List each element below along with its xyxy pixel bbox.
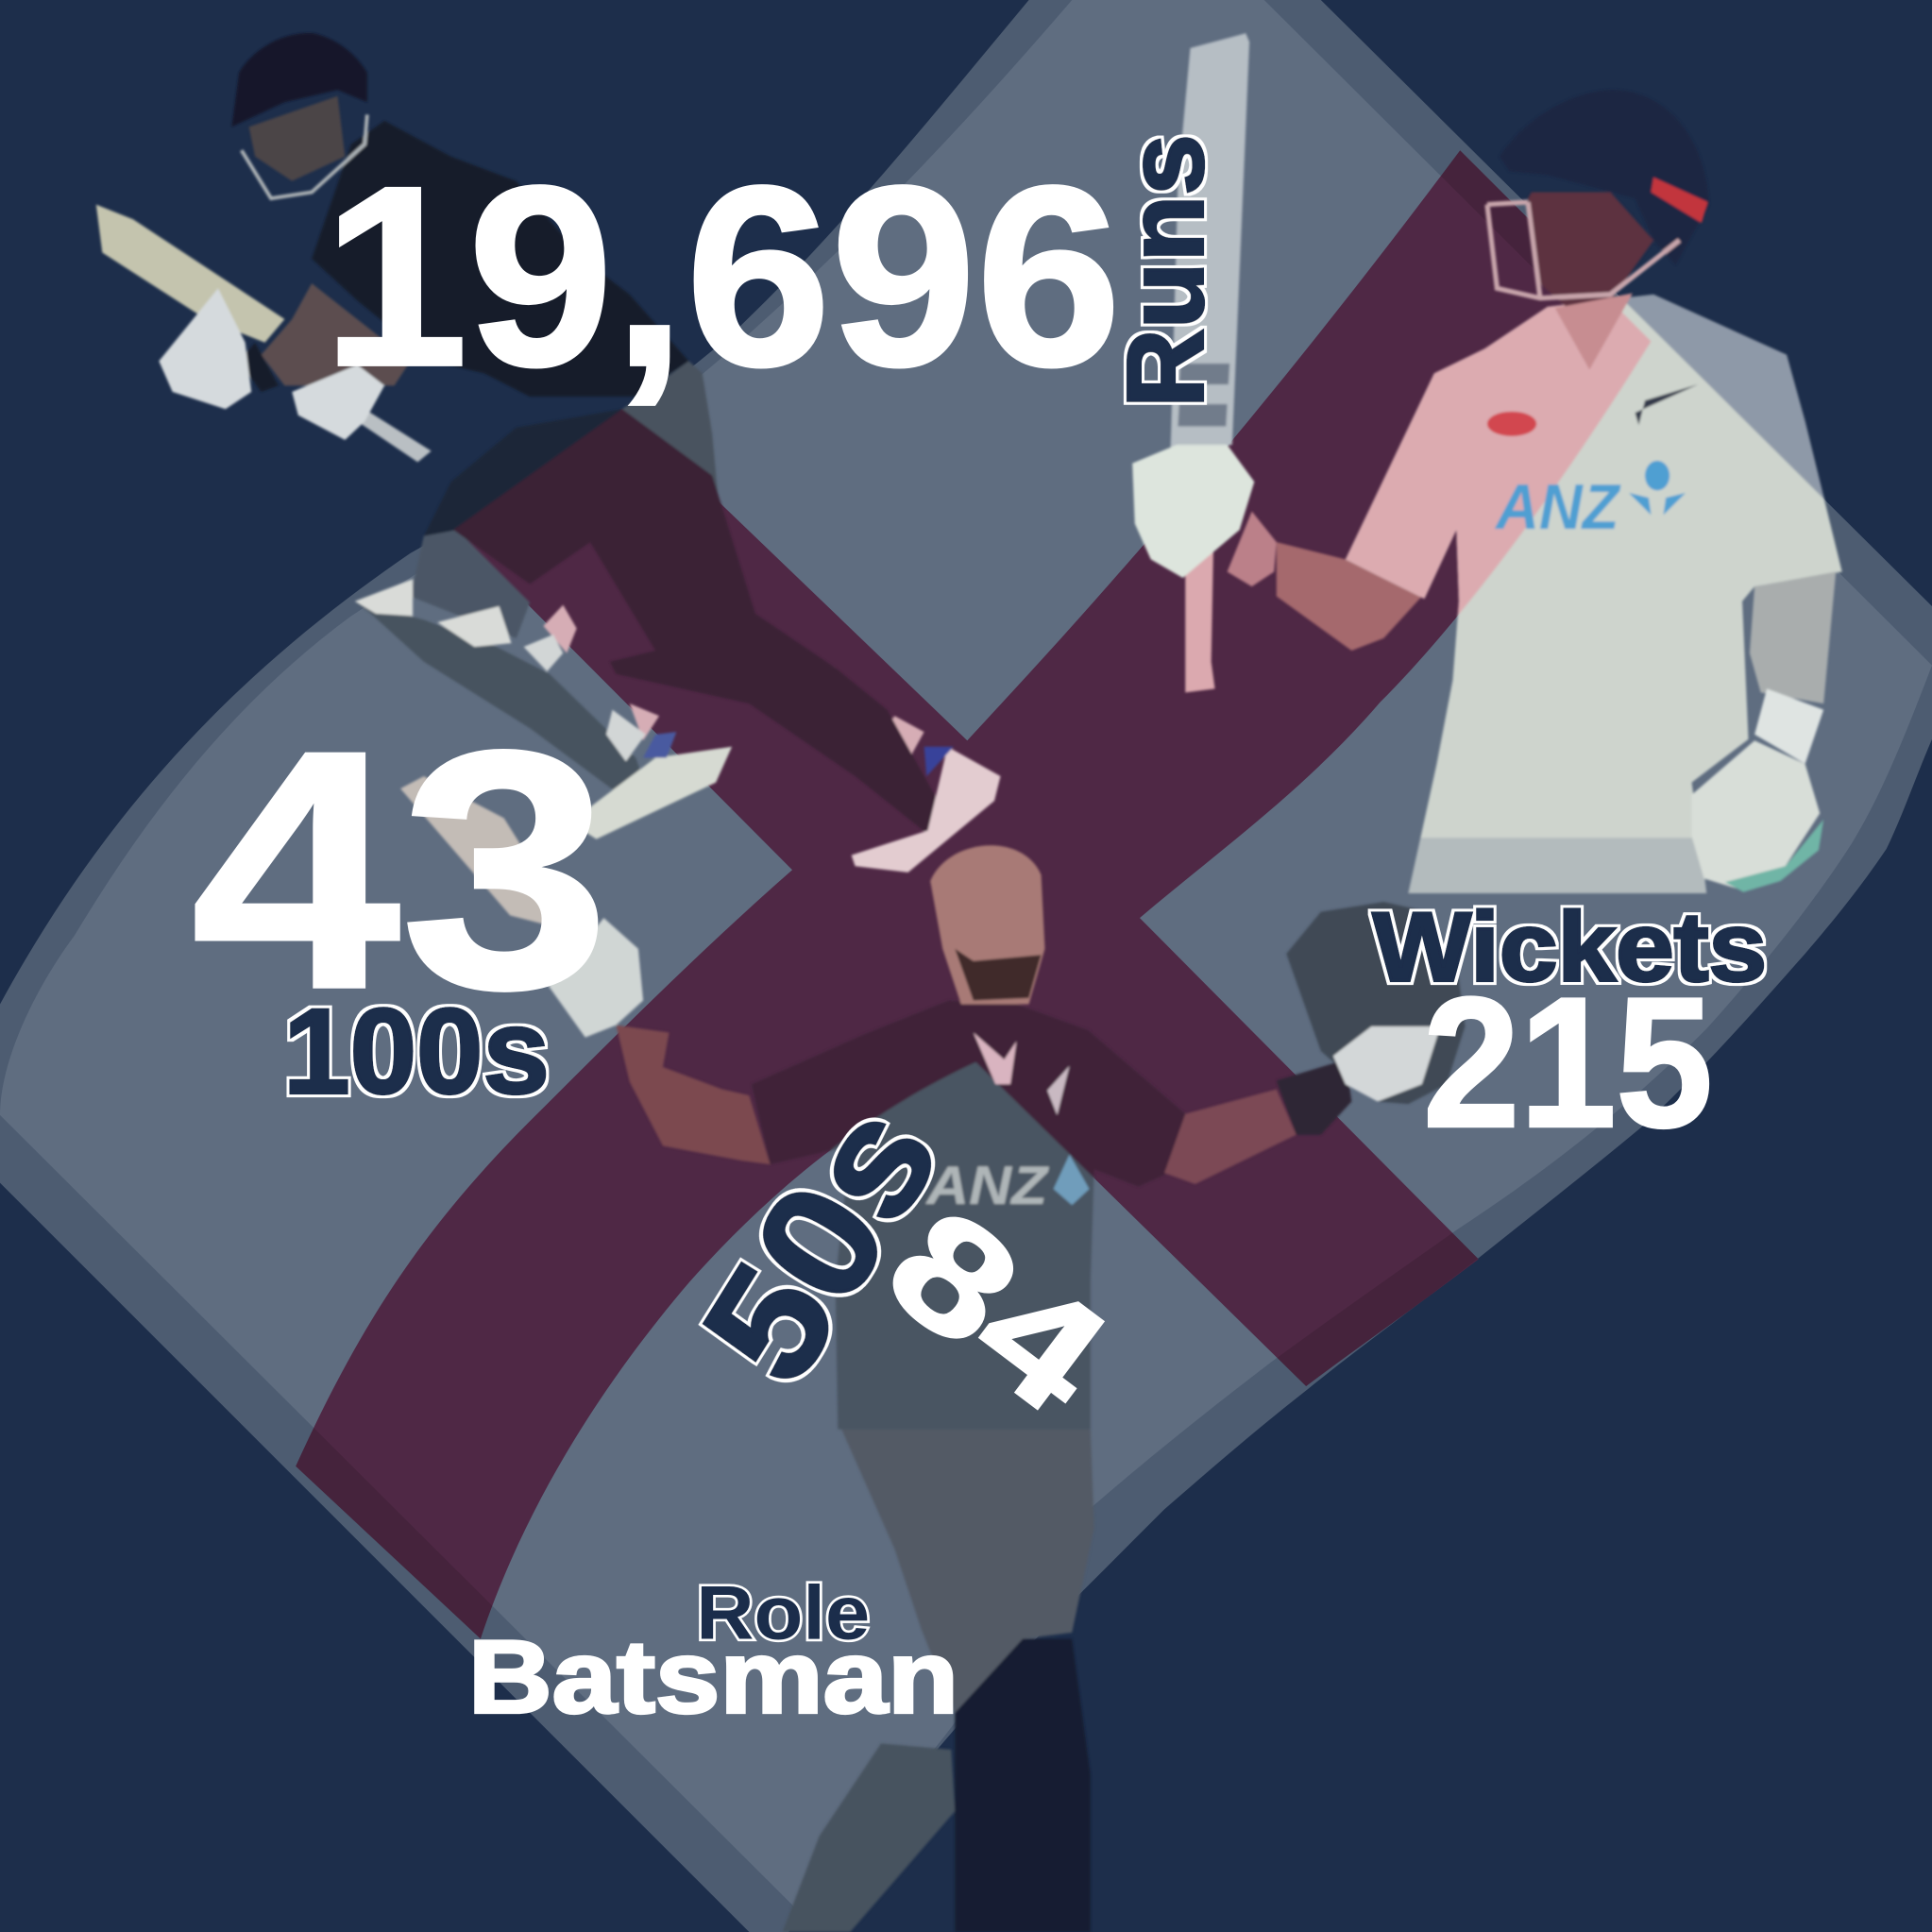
collar xyxy=(974,1032,1016,1084)
crest xyxy=(1047,1066,1070,1115)
sponsor icon xyxy=(1054,1155,1089,1205)
shirt over navy xyxy=(1626,294,1824,499)
glove teal trim xyxy=(1725,820,1823,892)
stat: role label: Role xyxy=(696,1570,870,1655)
bat handle xyxy=(357,409,432,462)
bat checks xyxy=(1178,364,1229,426)
forearm left xyxy=(1277,542,1422,651)
shirt over maroon xyxy=(1345,304,1652,614)
player: centre batsman celebrating xyxy=(400,776,1465,1932)
sponsor: ANZ xyxy=(924,1156,1049,1216)
bat right xyxy=(1286,902,1465,1104)
forearm right xyxy=(1750,571,1836,703)
player: top-left batsman running xyxy=(96,33,1001,873)
front shoe xyxy=(852,747,1001,873)
left arm xyxy=(616,1025,771,1164)
glove lower xyxy=(1692,740,1820,889)
rear shoe and pad highlights xyxy=(355,579,512,647)
arm xyxy=(262,283,411,385)
bat handle xyxy=(1185,536,1215,692)
jersey over maroon xyxy=(751,999,1186,1188)
face and beard xyxy=(1528,193,1653,307)
shirt maker logo xyxy=(1487,412,1536,436)
jersey xyxy=(752,1001,1185,1430)
maroon tips darkened over band xyxy=(297,151,1533,1638)
glove top xyxy=(1132,445,1254,578)
stat: wickets number: 215 xyxy=(1423,960,1713,1166)
wrist band xyxy=(239,343,279,392)
bat left xyxy=(400,776,553,926)
trousers xyxy=(841,1430,1094,1713)
mid shoe xyxy=(583,747,732,839)
crest xyxy=(1635,384,1698,425)
gray hip xyxy=(622,361,719,499)
face xyxy=(249,96,345,181)
visor band xyxy=(1651,178,1708,223)
stat: fifties label: 50s xyxy=(669,1074,974,1412)
helmet grille xyxy=(1487,202,1680,298)
right arm xyxy=(1164,1089,1296,1184)
neck xyxy=(1555,294,1633,369)
sock checks xyxy=(524,635,646,761)
stat: runs number: 19,696 xyxy=(323,132,1121,419)
shirt and trousers xyxy=(1346,295,1842,893)
stat: role value: Batsman xyxy=(468,1620,958,1736)
maroon cross xyxy=(296,150,1651,1638)
trousers shade xyxy=(1408,838,1706,893)
torso xyxy=(312,121,688,397)
navy hip xyxy=(424,409,622,536)
glove left xyxy=(549,918,643,1038)
stat: hundreds number: 43 xyxy=(191,681,610,1059)
mid shoe blue xyxy=(643,732,676,757)
glove right xyxy=(1333,1026,1440,1102)
helmet xyxy=(1500,90,1709,265)
front trousers xyxy=(453,409,941,834)
bat raised xyxy=(1171,33,1249,451)
wrist band xyxy=(1277,1059,1351,1135)
player: right batsman in whites xyxy=(1132,33,1842,893)
wrist band xyxy=(1754,688,1823,764)
stat: hundreds label: 100s xyxy=(283,984,550,1119)
stat: wickets label: Wickets xyxy=(1373,893,1767,1003)
grille xyxy=(242,114,367,198)
sponsor: ANZ xyxy=(1494,472,1621,543)
shoe blue xyxy=(924,747,954,776)
stat: runs label: Runs xyxy=(1106,134,1227,408)
bat xyxy=(96,205,284,343)
lower pad and bat xyxy=(783,1743,955,1932)
sponsor icon xyxy=(1629,461,1686,515)
lower leg over navy xyxy=(955,1638,1091,1932)
back leg trousers xyxy=(411,530,530,638)
socks and straps xyxy=(543,605,924,768)
back leg pad xyxy=(355,602,653,812)
wrist guard xyxy=(1228,512,1277,586)
head xyxy=(930,845,1045,1004)
helmet xyxy=(231,33,367,127)
gloves xyxy=(159,288,384,440)
stat: fifties number: 84 xyxy=(856,1175,1138,1447)
beard xyxy=(955,949,1042,1001)
